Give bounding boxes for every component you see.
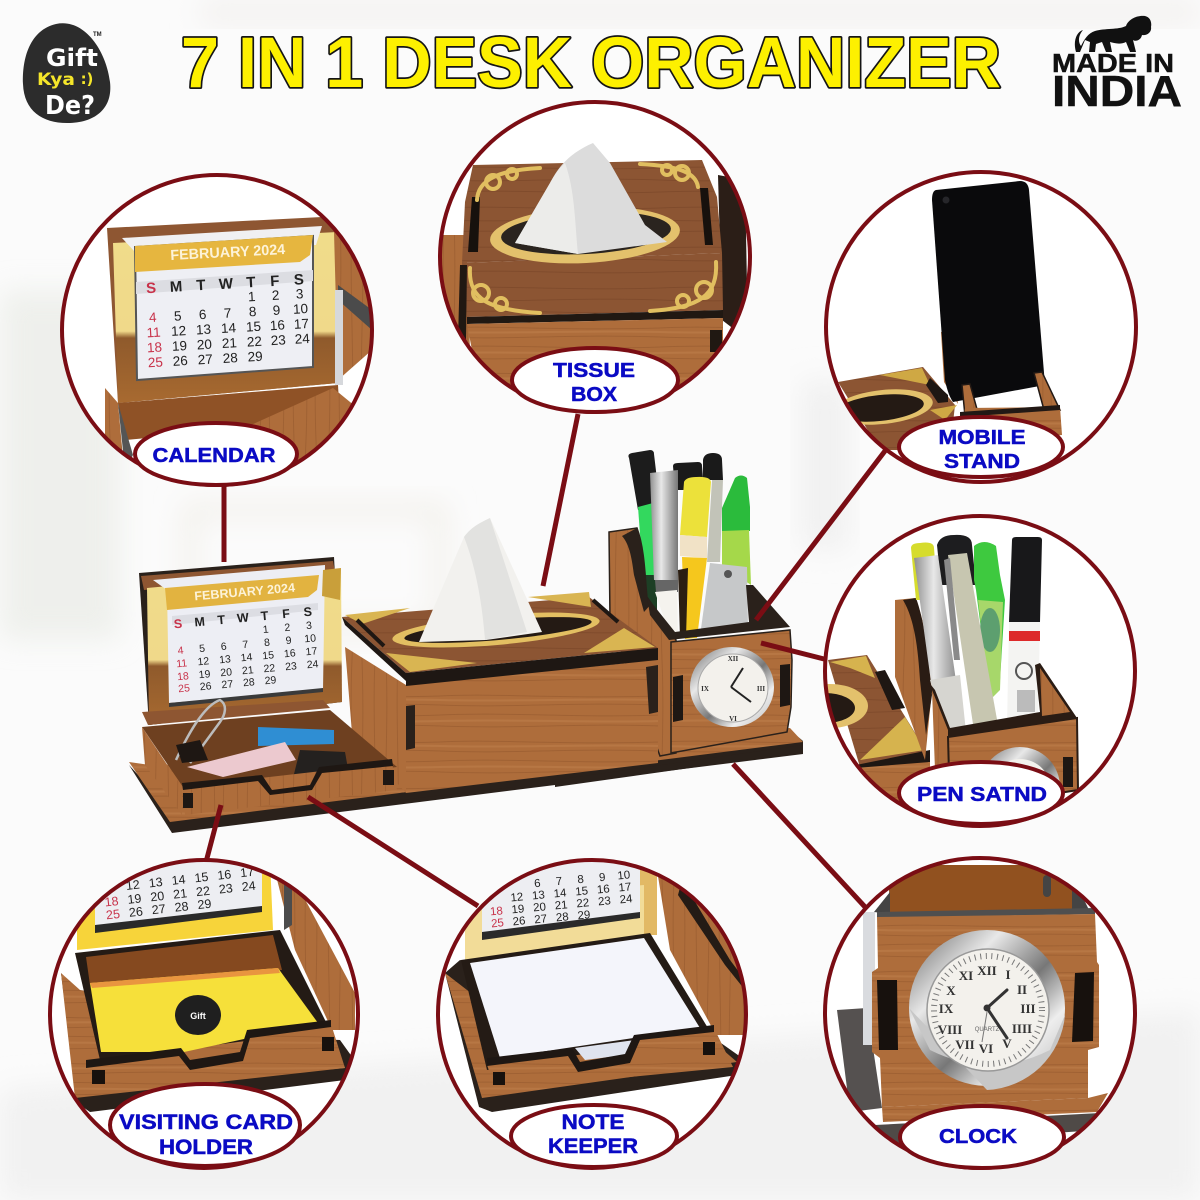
clock dial: VII: [955, 1037, 975, 1052]
calendar stand with gold mirror: 18: [177, 670, 190, 683]
panel: pen stand: [823, 514, 1137, 828]
pens in pen holder: [628, 450, 751, 640]
calendar frame: 12: [171, 323, 187, 339]
organizer base board: [129, 728, 803, 833]
connector: mobile stand: [756, 447, 888, 620]
badge: made in India: INDIA: [1052, 67, 1182, 116]
calendar frame: 26: [172, 353, 188, 369]
mirror and calendar: 20: [533, 901, 547, 914]
clock dial: III: [1020, 1001, 1036, 1016]
calendar stand with gold mirror: 14: [240, 651, 253, 664]
clock on pen holder: III: [757, 685, 765, 693]
clock on pen holder: XII: [728, 655, 739, 663]
clock dial: VIII: [938, 1022, 962, 1037]
calendar frame: FEBRUARY 2024: [170, 242, 286, 264]
clock dial: I: [1005, 967, 1011, 982]
tissue box: [342, 592, 658, 793]
mirror and calendar: 6: [148, 849, 157, 863]
mirror and calendar: 9: [598, 872, 606, 884]
clock dial: IX: [939, 1001, 954, 1016]
mirror and calendar: 24: [241, 879, 256, 894]
calendar stand with gold mirror: 5: [199, 643, 206, 655]
mirror and calendar: 18: [104, 894, 119, 909]
mirror and calendar: 14: [553, 887, 568, 900]
calendar frame: 25: [147, 354, 163, 370]
calendar stand with gold mirror: 11: [176, 657, 188, 670]
mirror and calendar: 27: [534, 913, 548, 926]
calendar stand with gold mirror: 22: [263, 662, 276, 675]
calendar stand with gold mirror: S: [303, 605, 313, 619]
connector: clock: [733, 764, 866, 908]
calendar frame: S: [146, 280, 157, 297]
calendar stand with gold mirror: 1: [262, 624, 269, 636]
mirror and calendar: 1: [575, 850, 582, 862]
label: tissue box: TISSUE: [553, 360, 635, 382]
calendar stand with gold mirror: T: [260, 609, 269, 623]
mirror and calendar: 19: [511, 903, 525, 916]
calendar stand with gold mirror: 12: [197, 655, 210, 668]
back panel: [895, 598, 932, 760]
tissue: [515, 143, 667, 254]
connector: pen stand: [761, 643, 828, 660]
label: clock: CLOCK: [939, 1126, 1018, 1148]
calendar stand with gold mirror: 16: [283, 647, 296, 660]
calendar frame: 13: [196, 322, 211, 337]
label: clock: [900, 1106, 1064, 1168]
clock on pen holder: VI: [729, 715, 737, 723]
clock dial: QUARTZ: [975, 1027, 1000, 1033]
calendar frame: W: [218, 275, 234, 293]
calendar frame: 27: [197, 352, 213, 367]
tissue box lid: [458, 160, 723, 392]
clock dial: X: [946, 983, 956, 998]
logo: Gift Kya De: De?: [45, 91, 95, 121]
logo: Gift Kya De: Kya: [37, 70, 75, 90]
logo: Gift Kya De: [23, 23, 110, 123]
mirror and calendar: 7: [555, 876, 563, 888]
stand back: [941, 332, 958, 404]
mirror and calendar: 27: [151, 902, 166, 917]
mirror and calendar: 12: [510, 891, 524, 904]
pens: [911, 535, 1042, 735]
mirror and calendar: 10: [617, 869, 631, 882]
calendar frame: 17: [293, 316, 309, 332]
clock dial: XII: [977, 963, 997, 978]
stand front: [960, 371, 1062, 436]
clock box front: [872, 908, 1099, 1107]
calendar stand with gold mirror: 4: [177, 645, 184, 657]
label: tissue box: BOX: [571, 384, 618, 406]
calendar frame: 4: [149, 310, 157, 325]
pen holder front: [931, 663, 1079, 794]
mirror and calendar: 16: [217, 867, 232, 883]
tray rim: [461, 933, 711, 1070]
gold corners: [470, 164, 716, 313]
connector: tissue box: [543, 414, 578, 586]
badge: made in India: MADE IN: [1052, 48, 1174, 78]
yellow visiting card: [90, 968, 318, 1052]
tray front panel: [86, 1020, 345, 1084]
badge: made in India: [1052, 16, 1182, 116]
mirror and calendar: 14: [171, 872, 186, 888]
calendar frame: [107, 217, 345, 403]
calendar frame: 22: [246, 334, 262, 350]
mirror and calendar: 15: [575, 885, 589, 898]
mirror and calendar: 12: [125, 878, 141, 893]
panel: mobile stand: [820, 170, 1145, 490]
panel: note keeper: [436, 845, 748, 1170]
label: mobile stand: MOBILE: [938, 427, 1026, 449]
neighbouring parts: [441, 175, 748, 350]
panel: clock: [820, 855, 1145, 1175]
calendar frame: 6: [198, 307, 207, 322]
calendar frame: F: [270, 273, 280, 290]
calendar stand with gold mirror: 9: [285, 635, 292, 647]
label: visiting card holder: VISITING CARD: [119, 1111, 293, 1134]
clock dial: VI: [979, 1041, 993, 1056]
label: visiting card holder: HOLDER: [159, 1136, 253, 1159]
calendar stand with gold mirror: 23: [285, 660, 298, 673]
mirror and calendar: 13: [148, 875, 163, 890]
calendar frame: S: [293, 271, 304, 289]
logo: Gift Kya De: :): [81, 70, 93, 88]
mirror and calendar: 8: [577, 874, 584, 886]
mirror and calendar: 21: [554, 899, 568, 912]
logo: Gift Kya De: TM: [93, 32, 102, 38]
calendar stand with gold mirror: 15: [262, 649, 275, 662]
connector: visiting card holder: [206, 805, 221, 862]
calendar frame: 19: [172, 338, 187, 354]
label: calendar: [135, 423, 297, 485]
calendar stand with gold mirror: FEBRUARY 2024: [194, 581, 296, 603]
pen holder box: [609, 528, 792, 756]
calendar stand with gold mirror: M: [194, 615, 206, 629]
mirror and calendar: 25: [491, 917, 504, 930]
mirror and calendar: 22: [195, 884, 211, 899]
clock dial: [909, 930, 1065, 1090]
calendar frame: 28: [222, 350, 238, 366]
calendar frame: 8: [248, 304, 257, 319]
title: 7 IN 1 DESK ORGANIZER: [181, 24, 1001, 103]
mirror and calendar: 17: [239, 865, 255, 880]
base under clock: [875, 1093, 1108, 1145]
calendar stand with gold mirror: 29: [264, 674, 277, 687]
calendar frame: 9: [272, 303, 281, 318]
clock dial: V: [1002, 1036, 1012, 1051]
mirror and calendar: 26: [128, 904, 144, 920]
label: pen stand: PEN SATND: [917, 784, 1047, 806]
mirror and calendar: [77, 862, 273, 950]
calendar frame: 3: [295, 286, 304, 302]
label: pen stand: [899, 762, 1063, 824]
mirror and calendar: 17: [618, 881, 632, 894]
clock on pen holder: IX: [701, 685, 709, 693]
label: mobile stand: [899, 417, 1063, 477]
clock dial: XI: [959, 968, 973, 983]
mirror and calendar: 19: [127, 891, 142, 907]
panel: tissue box: [440, 100, 760, 420]
label: note keeper: [511, 1105, 677, 1167]
calendar stand with gold mirror: 24: [306, 658, 319, 671]
calendar frame: 14: [221, 320, 237, 336]
calendar frame: 15: [246, 319, 261, 335]
main product: 7 in 1 desk organizer: [129, 450, 803, 833]
label: note keeper: NOTE: [562, 1111, 624, 1134]
calendar frame: 20: [196, 337, 212, 352]
base board: [445, 960, 745, 1112]
calendar stand with gold mirror: T: [217, 613, 226, 627]
mirror and calendar: 7: [171, 846, 180, 861]
tissue paper: [419, 518, 542, 642]
tray interior: [75, 930, 330, 1060]
label: note keeper: KEEPER: [548, 1135, 638, 1158]
calendar stand with gold mirror: 8: [264, 637, 271, 649]
calendar stand with gold mirror: W: [236, 610, 250, 625]
icon: smartphone: [932, 181, 1045, 402]
visiting card tray with stationery: [142, 700, 397, 815]
base board: [61, 973, 360, 1112]
mirror and calendar: 28: [555, 911, 569, 924]
calendar frame: T: [196, 277, 206, 294]
tissue box piece: [831, 367, 957, 450]
calendar frame: M: [169, 278, 183, 296]
mirror and calendar: 13: [532, 889, 545, 902]
mirror and calendar: 15: [194, 870, 209, 885]
connector lines: [206, 414, 888, 908]
connector: note keeper: [308, 797, 478, 906]
calendar stand with gold mirror: 17: [305, 645, 318, 658]
mirror and calendar: 22: [576, 897, 590, 910]
calendar stand with gold mirror: F: [282, 607, 291, 621]
calendar stand with gold mirror: 27: [221, 678, 234, 691]
calendar stand with gold mirror: 2: [284, 622, 291, 634]
calendar stand with gold mirror: 3: [306, 620, 313, 632]
tray front panel: [487, 1025, 733, 1090]
mirror and calendar: [465, 862, 644, 960]
clock dial: II: [1017, 982, 1027, 997]
calendar frame: 1: [248, 289, 256, 304]
calendar stand with gold mirror: 13: [219, 653, 232, 666]
calendar stand with gold mirror: 21: [241, 664, 254, 677]
calendar stand with gold mirror: 20: [220, 666, 233, 679]
calendar stand with gold mirror: 25: [178, 682, 191, 695]
calendar stand with gold mirror: 10: [304, 632, 317, 645]
calendar stand with gold mirror: 6: [220, 641, 227, 653]
mirror and calendar: 25: [105, 907, 121, 922]
mirror and calendar: 23: [598, 895, 611, 908]
calendar stand with gold mirror: [139, 557, 342, 725]
calendar stand with gold mirror: S: [173, 617, 183, 631]
mirror and calendar: 16: [596, 883, 610, 896]
calendar stand with gold mirror: 26: [199, 680, 212, 693]
calendar frame: 7: [223, 305, 232, 321]
right side panel: [277, 880, 355, 1030]
calendar frame: 11: [146, 325, 161, 340]
mirror and calendar: 23: [218, 881, 234, 897]
calendar frame: 23: [270, 332, 286, 348]
label: tissue box: [512, 348, 678, 412]
mirror and calendar: 21: [172, 886, 188, 902]
mirror and calendar: 28: [174, 899, 189, 915]
white note paper: [470, 938, 700, 1060]
mirror and calendar: 2: [596, 848, 604, 860]
mirror and calendar: 29: [577, 909, 591, 922]
clock on pen holder: [690, 647, 774, 727]
panel: visiting card holder: [48, 838, 360, 1170]
connector: calendar: [222, 486, 226, 562]
calendar frame: 16: [269, 317, 285, 333]
calendar stand with gold mirror: 28: [243, 676, 255, 689]
logo: Gift Kya De: Gift: [46, 44, 98, 72]
calendar stand with gold mirror: 7: [242, 639, 249, 651]
calendar frame: T: [246, 274, 256, 291]
calendar frame: 18: [147, 339, 162, 355]
calendar stand with gold mirror: 19: [198, 668, 211, 681]
label: visiting card holder: [110, 1084, 300, 1166]
mirror and calendar: 24: [619, 893, 634, 906]
mirror and calendar: 6: [534, 878, 541, 890]
label: calendar: CALENDAR: [152, 445, 276, 467]
calendar frame: 5: [174, 308, 182, 324]
mirror and calendar: 8: [194, 843, 203, 858]
mirror and calendar: 20: [150, 889, 165, 904]
mirror and calendar: 18: [489, 905, 503, 918]
calendar frame: 2: [272, 288, 280, 303]
calendar frame: 24: [294, 331, 311, 347]
mirror and calendar: 26: [512, 915, 526, 928]
clock dial: IIII: [1012, 1021, 1032, 1036]
tray below calendar: [105, 232, 370, 460]
label: mobile stand: STAND: [944, 451, 1020, 473]
tissue box corner: [828, 655, 930, 802]
right side panel: [640, 868, 745, 1035]
calendar frame: 10: [293, 301, 308, 317]
calendar frame: 29: [247, 349, 263, 365]
mirror and calendar: 29: [197, 897, 212, 912]
panel: calendar: [60, 170, 380, 490]
yellow visiting card: Gift: [190, 1011, 206, 1021]
left base and box interior: [837, 865, 1090, 1112]
mirror and calendar: 9: [217, 841, 226, 856]
calendar frame: 21: [221, 335, 237, 351]
gold oval opening: [490, 208, 680, 264]
